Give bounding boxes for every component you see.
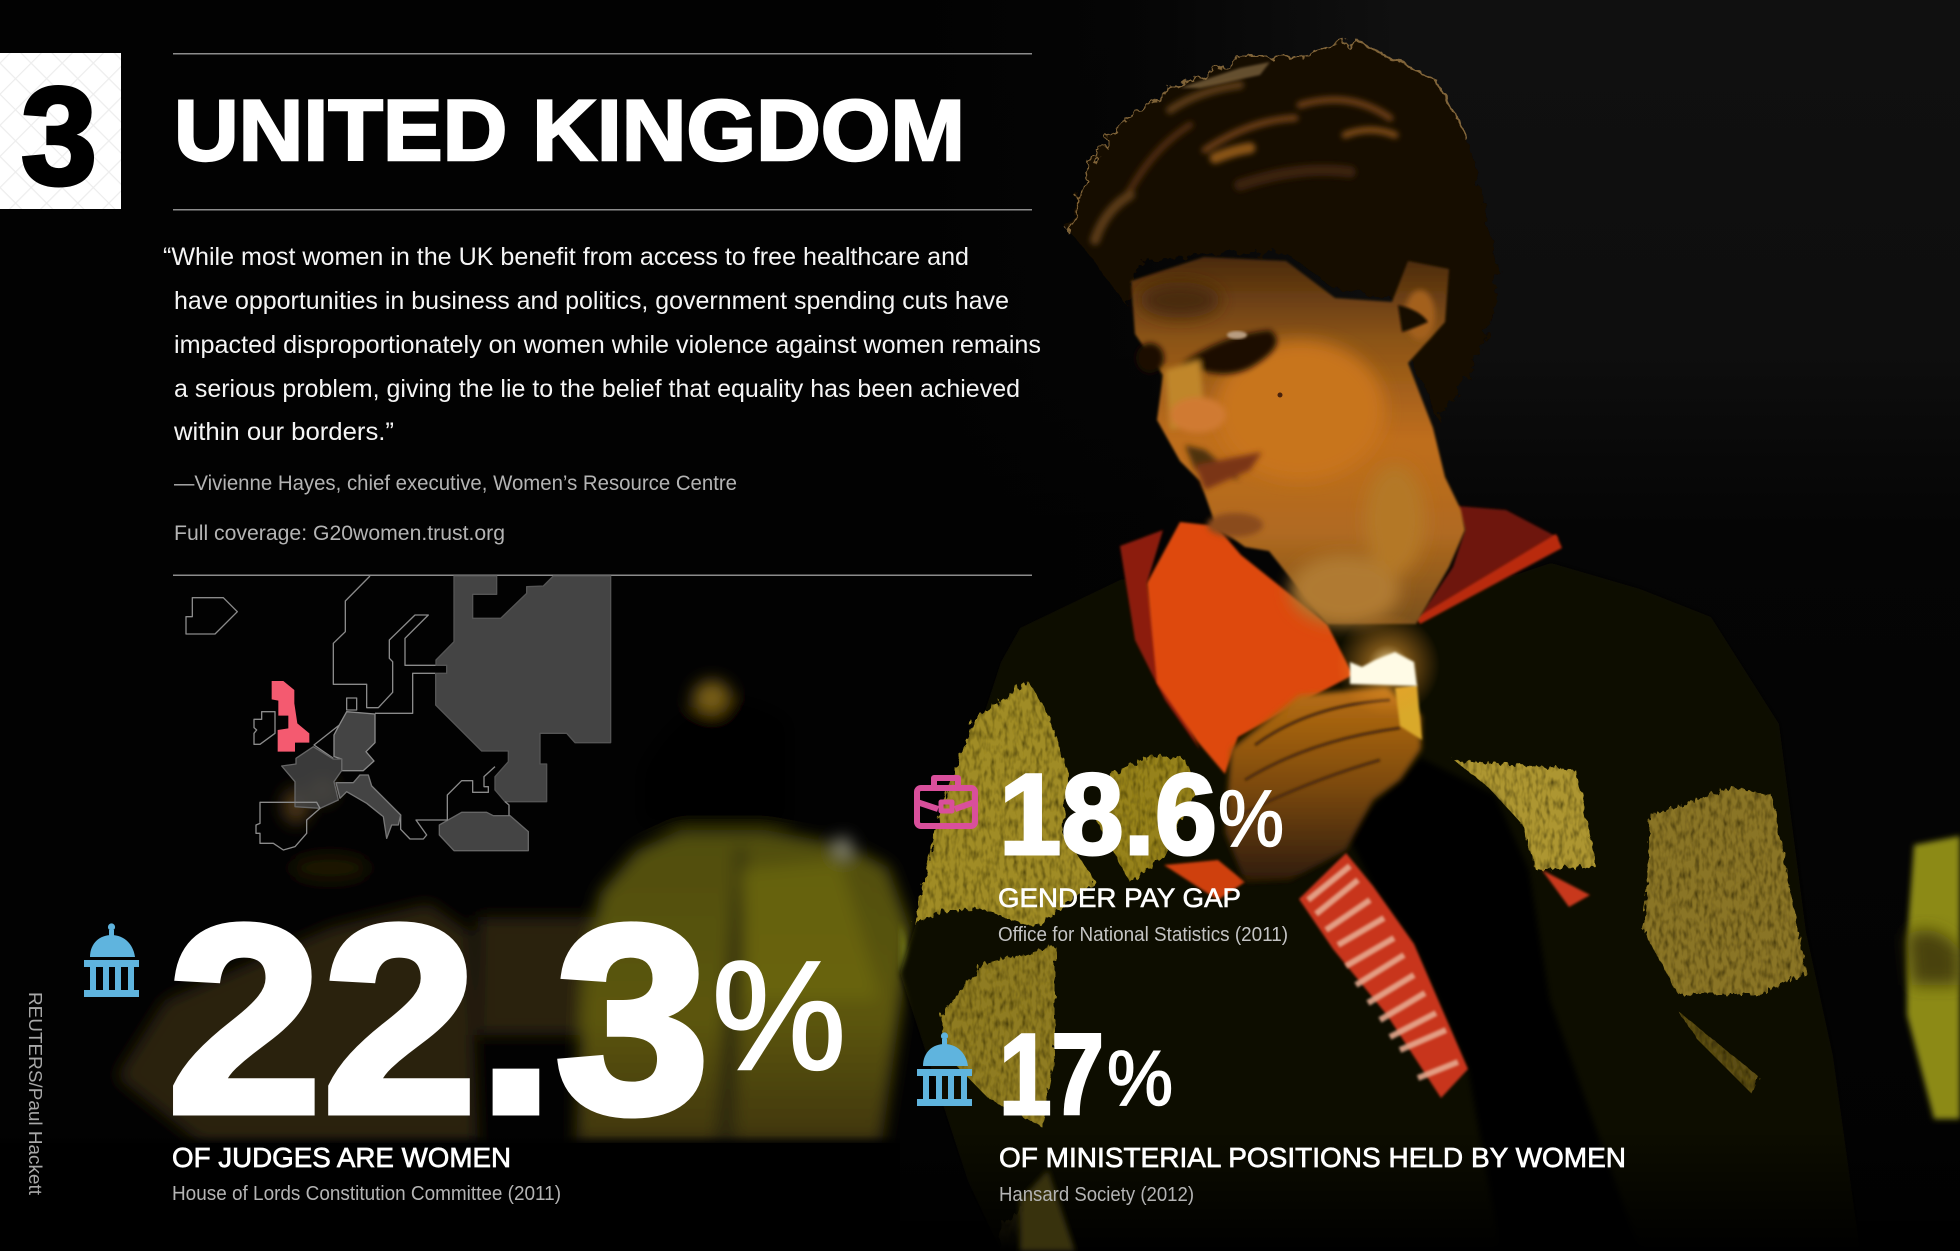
quote: a serious problem, giving the lie to the belief that equality has been achieved	[174, 375, 1020, 403]
knit yellow patches	[914, 681, 1806, 1251]
icon: capitol building, ministers	[917, 1032, 972, 1106]
woman sweater	[900, 563, 1860, 1251]
label: judges: OF JUDGES ARE WOMEN	[172, 1142, 511, 1173]
map of Europe with UK highlighted	[186, 576, 611, 851]
stat: 22.3%: 22.3	[167, 869, 710, 1169]
stat: 17%: 17	[999, 1011, 1104, 1139]
section number badge: 3	[21, 59, 97, 214]
Italy	[336, 775, 401, 838]
Turkey	[439, 812, 528, 851]
quote: “While most women in the UK benefit from access to free healthcare and	[163, 243, 969, 271]
right background figure	[1907, 836, 1960, 1119]
United Kingdom	[272, 681, 309, 752]
source: pay gap: Office for National Statistics (2011)	[998, 924, 1288, 946]
icon: capitol building, judges	[84, 923, 139, 997]
Germany	[334, 712, 375, 771]
hands, striped scarf and candle	[1225, 613, 1640, 1251]
stat: 17%: %	[1107, 1034, 1173, 1122]
stat: 22.3%: %	[712, 929, 846, 1102]
icon: briefcase	[917, 778, 975, 826]
Spain	[256, 802, 320, 850]
source: judges: House of Lords Constitution Committee (2011)	[172, 1183, 561, 1205]
photo credit: REUTERS/Paul Hackett	[25, 992, 45, 1195]
title bottom rule	[173, 209, 1032, 210]
quote	[163, 243, 1041, 446]
label: pay gap: GENDER PAY GAP	[998, 883, 1241, 913]
Denmark	[347, 698, 357, 710]
France	[282, 747, 342, 808]
quote: have opportunities in business and politics, government spending cuts have	[174, 287, 1009, 315]
blurred police officer in yellow jacket	[116, 680, 912, 1143]
stat: 18.6%: 18.6	[999, 751, 1217, 879]
Iceland	[186, 598, 237, 634]
scarf and collar	[1120, 506, 1590, 907]
quote: within our borders.”	[173, 418, 394, 446]
face and neck	[1131, 257, 1465, 625]
stat: 18.6%: %	[1218, 774, 1284, 863]
map rule	[173, 574, 1032, 576]
Ireland	[254, 712, 275, 744]
full coverage link: Full coverage: G20women.trust.org	[174, 522, 505, 545]
quote: impacted disproportionately on women while violence against women remains	[174, 331, 1041, 359]
Benelux	[314, 725, 339, 758]
section number badge	[0, 53, 121, 214]
Eastern Europe coast	[372, 767, 509, 839]
title: UNITED KINGDOM	[174, 83, 965, 179]
Scandinavia	[333, 576, 437, 713]
Russia	[436, 576, 611, 802]
top rule	[173, 53, 1032, 54]
attribution: —Vivienne Hayes, chief executive, Women’s Resource Centre	[174, 472, 737, 495]
bottom fade of photo	[0, 1135, 900, 1147]
hair	[1067, 40, 1498, 420]
label: ministers: OF MINISTERIAL POSITIONS HELD BY WOMEN	[999, 1142, 1626, 1173]
source: ministers: Hansard Society (2012)	[999, 1184, 1194, 1206]
